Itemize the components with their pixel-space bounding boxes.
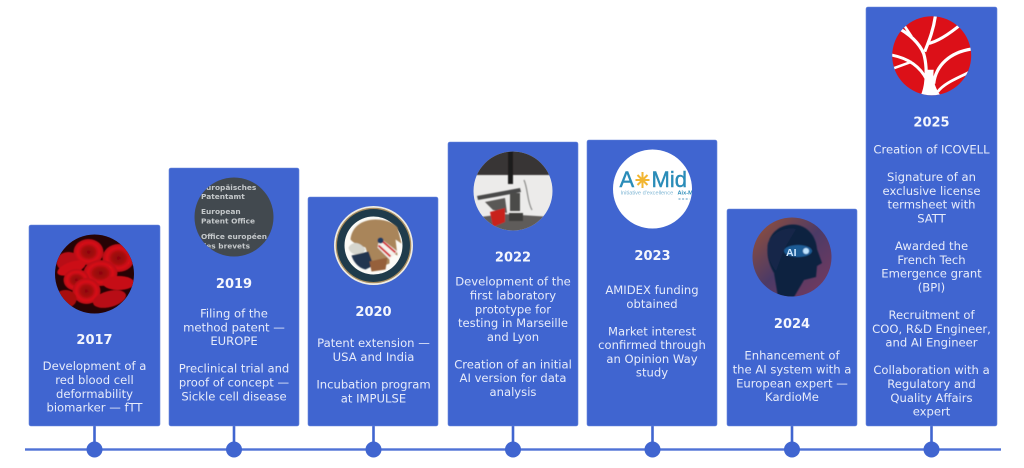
description: Filing of the	[200, 306, 268, 320]
description: Sickle cell disease	[181, 389, 287, 403]
description: SATT	[917, 211, 947, 225]
description: Development of a	[43, 359, 146, 373]
description: termsheet with	[887, 198, 976, 212]
description	[872, 143, 991, 419]
icon: AI head	[752, 217, 832, 297]
description: KardioMe	[765, 390, 819, 404]
description: Development of the	[455, 275, 571, 289]
icon: USPTO seal	[334, 206, 413, 285]
description: prototype for	[475, 302, 551, 316]
description: European expert —	[736, 376, 848, 390]
icon: European Patent Office sign: des brevets	[201, 242, 251, 250]
description: Emergence grant	[881, 267, 982, 281]
description: Signature of an	[887, 170, 976, 184]
icon: European Patent Office sign: Patentamt	[201, 192, 245, 201]
description	[454, 275, 572, 399]
icon: ICOVELL tree logo	[890, 14, 974, 96]
description: deformability	[56, 387, 133, 401]
icon: A*Midex logo: Initiative d'excellence	[620, 190, 673, 196]
icon: laboratory prototype photo	[473, 151, 553, 231]
description: Market interest	[608, 324, 696, 338]
description	[43, 359, 146, 414]
panel: 2023	[587, 140, 717, 426]
icon: A*Midex logo: Mid	[652, 167, 687, 192]
icon: European Patent Office sign: European	[201, 207, 241, 216]
description: method patent —	[183, 320, 285, 334]
description: (BPI)	[918, 280, 945, 294]
description: AMIDEX funding	[605, 283, 699, 297]
panel: 2025	[866, 7, 997, 426]
description: confirmed through	[598, 338, 706, 352]
description: Collaboration with a	[873, 363, 990, 377]
description: and AI Engineer	[885, 336, 978, 350]
description: Quality Affairs	[890, 391, 973, 405]
description: proof of concept —	[179, 376, 289, 390]
description	[598, 283, 706, 380]
year: 2019	[216, 277, 252, 292]
year: 2023	[634, 249, 671, 264]
icon: AI head: AI	[786, 247, 797, 259]
description: USA and India	[333, 350, 414, 364]
description: Enhancement of	[744, 349, 840, 363]
description	[316, 336, 431, 406]
description: Regulatory and	[887, 377, 976, 391]
description: the AI system with a	[733, 362, 851, 376]
description	[733, 349, 851, 404]
description: EUROPE	[210, 334, 258, 348]
description: French Tech	[897, 253, 966, 267]
description: Recruitment of	[888, 308, 975, 322]
description: biomarker — fTT	[46, 400, 143, 414]
icon: European Patent Office sign: Office européen	[201, 232, 267, 241]
year: 2020	[355, 305, 392, 320]
description: Creation of an initial	[454, 357, 572, 371]
year: 2022	[495, 250, 531, 266]
description: COO, R&D Engineer,	[872, 322, 991, 336]
description: at IMPULSE	[341, 392, 406, 406]
description: analysis	[490, 385, 536, 399]
description: AI version for data	[460, 371, 566, 385]
description: testing in Marseille	[458, 316, 568, 330]
description: obtained	[626, 297, 678, 311]
icon: A*Midex logo: A	[620, 167, 634, 192]
description: and Lyon	[487, 330, 539, 344]
panel: 2022	[448, 142, 578, 426]
description	[179, 306, 289, 403]
description: Patent extension —	[317, 336, 430, 350]
icon: A*Midex logo: Aix-M	[678, 190, 693, 196]
icon: European Patent Office sign: Europäisches	[201, 183, 257, 192]
panel: 2019	[169, 168, 299, 426]
description: study	[636, 366, 668, 380]
panel: 2017	[29, 225, 160, 426]
description: expert	[913, 405, 951, 419]
icon: A*Midex logo	[612, 149, 693, 229]
description: Awarded the	[895, 239, 968, 253]
panel: 2024	[727, 209, 857, 426]
timeline axis	[25, 426, 1001, 458]
description: exclusive license	[883, 184, 980, 198]
icon: European Patent Office sign: Patent Office	[201, 216, 255, 226]
year: 2024	[774, 317, 810, 332]
description: Creation of ICOVELL	[873, 143, 990, 157]
description: Preclinical trial and	[179, 362, 289, 376]
description: an Opinion Way	[606, 352, 698, 366]
icon: European Patent Office sign	[194, 177, 274, 257]
description: Incubation program	[316, 378, 431, 392]
year: 2025	[913, 116, 950, 130]
panel: 2020	[308, 197, 438, 426]
icon: red blood cells	[54, 234, 134, 314]
year: 2017	[76, 333, 113, 348]
description: first laboratory	[470, 288, 556, 302]
description: red blood cell	[55, 373, 134, 387]
